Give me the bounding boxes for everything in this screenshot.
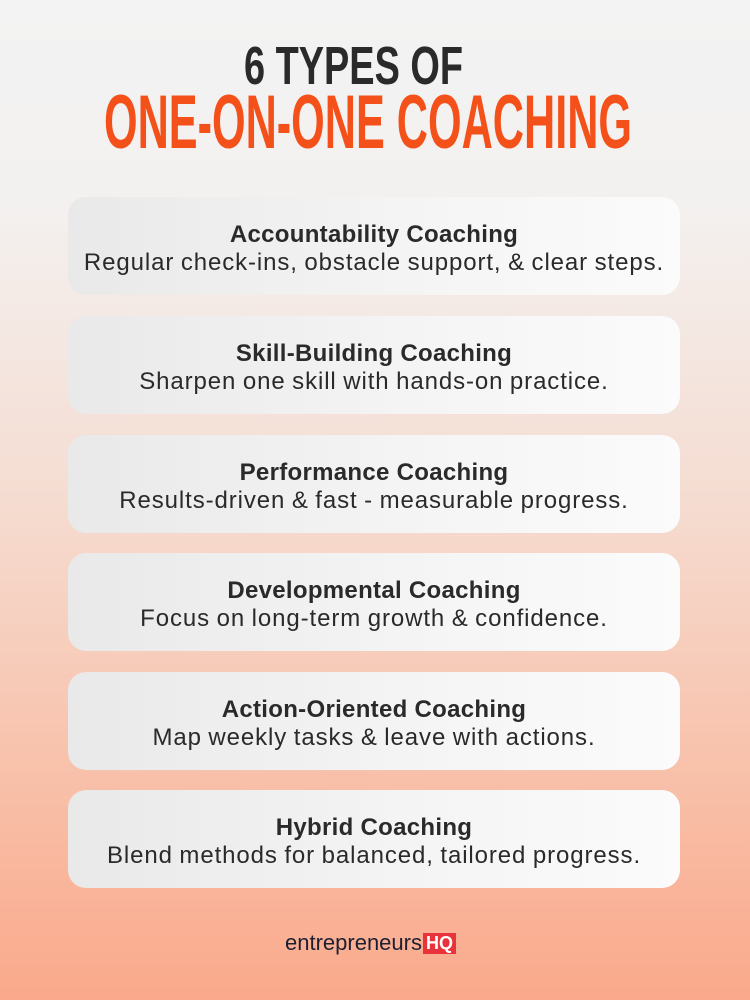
card: action-oriented: Map weekly tasks & leave with actions. bbox=[152, 724, 596, 751]
card: developmental bbox=[68, 553, 680, 651]
card: hybrid: Hybrid Coaching bbox=[276, 814, 472, 841]
card: hybrid: Blend methods for balanced, tailored progress. bbox=[107, 842, 641, 869]
card: accountability: Accountability Coaching bbox=[230, 221, 518, 248]
card: developmental: Developmental Coaching bbox=[227, 577, 521, 604]
card: performance: Results-driven & fast - measurable progress. bbox=[119, 487, 629, 514]
card: performance bbox=[68, 435, 680, 533]
card: hybrid bbox=[68, 790, 680, 888]
title line 1: 6 TYPES OF bbox=[244, 36, 463, 96]
logo: entrepreneurs bbox=[285, 930, 422, 955]
card: skill-building: Sharpen one skill with hands-on practice. bbox=[139, 368, 609, 395]
logo: HQ bbox=[426, 933, 453, 953]
title bbox=[104, 36, 632, 160]
card: accountability: Regular check-ins, obstacle support, & clear steps. bbox=[84, 249, 664, 276]
card: skill-building bbox=[68, 316, 680, 414]
card: developmental: Focus on long-term growth & confidence. bbox=[140, 605, 608, 632]
card: skill-building: Skill-Building Coaching bbox=[236, 340, 512, 367]
card: action-oriented bbox=[68, 672, 680, 770]
card: action-oriented: Action-Oriented Coaching bbox=[222, 696, 526, 723]
card: performance: Performance Coaching bbox=[240, 459, 508, 486]
card: accountability bbox=[68, 197, 680, 295]
